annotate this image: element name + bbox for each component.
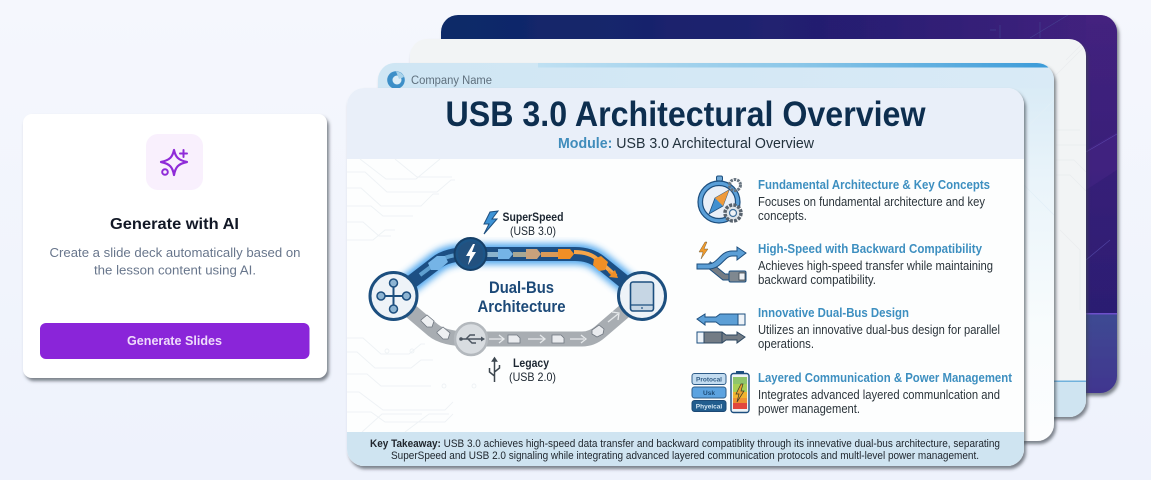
icon: compass and gears [698, 176, 741, 223]
feature: fundamental architecture [698, 176, 990, 223]
panel: third light blue slide [378, 63, 1054, 441]
footer band [347, 432, 1024, 466]
heading: generate with AI: Generate with AI [110, 216, 239, 233]
label: dual-bus architecture: Dual-Bus [489, 278, 554, 297]
body text: backward compatibility. [758, 273, 876, 287]
icon: protocol stack: Usk [703, 390, 715, 397]
card surface [23, 114, 327, 378]
usb node [455, 323, 487, 355]
body text: Utilizes an innovative dual-bus design for parallel [758, 323, 1000, 337]
label: dual-bus architecture: Architecture [478, 297, 566, 316]
icon: protocol stack [692, 374, 726, 412]
body text [758, 388, 1000, 416]
label: legacy: Legacy [513, 356, 549, 370]
hub node [370, 272, 417, 320]
diagram: dual-bus architecture [370, 210, 666, 384]
superspeed bus [393, 249, 642, 296]
feature: dual-bus design [697, 305, 1000, 351]
feature: layered communication [692, 370, 1013, 416]
top accent strip [538, 63, 1054, 68]
key takeaway [370, 438, 1000, 462]
body text: Focuses on fundamental architecture and key [758, 195, 986, 209]
label: legacy: (USB 2.0) [509, 370, 556, 384]
icon: battery [731, 371, 749, 412]
panel: front slide [347, 88, 1024, 466]
button: generate slides [40, 323, 310, 359]
heading: Layered Communication & Power Management [758, 370, 1013, 385]
tablet node [618, 272, 666, 320]
body text [758, 323, 1000, 351]
icon: sparkle [146, 134, 203, 190]
description text [50, 245, 300, 278]
description text: Create a slide deck automatically based on [50, 245, 300, 260]
key takeaway: SuperSpeed and USB 2.0 signaling while integrating advanced layered communication protocols and multl-level power management. [391, 450, 979, 462]
label: legacy [509, 356, 556, 384]
key takeaway: Key Takeaway: USB 3.0 achieves high-speed data transfer and backward compatiblity through its innevative dual-bus architecture, separating [370, 438, 1000, 450]
background circuit traces [347, 159, 476, 432]
lightning node [454, 238, 486, 270]
heading: High-Speed with Backward Compatibility [758, 241, 983, 256]
label: dual-bus architecture [478, 278, 566, 316]
body text: operations. [758, 337, 814, 351]
company name: Company Name [411, 75, 492, 87]
header band [347, 88, 1024, 159]
label: superspeed: SuperSpeed [502, 210, 564, 224]
icon: protocol stack: Phyeical [696, 404, 722, 410]
body text: Integrates advanced layered communlcation and [758, 388, 1000, 402]
body text: power management. [758, 402, 860, 416]
icon: superspeed bolt [484, 211, 498, 234]
feature: high-speed backward compatibility [697, 241, 993, 287]
icon: usb trident [490, 358, 500, 382]
company logo [387, 71, 405, 89]
panel: second light grey slide [410, 39, 1086, 417]
icon: opposing usb plugs [697, 314, 745, 343]
body text: concepts. [758, 209, 807, 223]
icon: merging arrow and plug [697, 242, 746, 282]
description text: the lesson content using AI. [94, 262, 256, 278]
panel: generate with AI card [23, 114, 327, 378]
body text: Achieves high-speed transfer while maintaining [758, 259, 993, 273]
slide body [347, 88, 1024, 466]
heading: Innovative Dual-Bus Design [758, 305, 909, 320]
panel: back dark slide [441, 15, 1117, 394]
module subtitle: Module: USB 3.0 Architectural Overview [558, 135, 814, 152]
label: superspeed: (USB 3.0) [510, 224, 556, 238]
title: USB 3.0 Architectural Overview [446, 94, 926, 134]
button: generate slides: Generate Slides [127, 334, 222, 348]
body text [758, 259, 993, 287]
icon: protocol stack: Protocal [696, 376, 722, 384]
legacy bus [393, 296, 642, 343]
label: superspeed [502, 210, 564, 238]
heading: Fundamental Architecture & Key Concepts [758, 177, 990, 192]
body text [758, 195, 986, 223]
data packets [428, 256, 448, 270]
